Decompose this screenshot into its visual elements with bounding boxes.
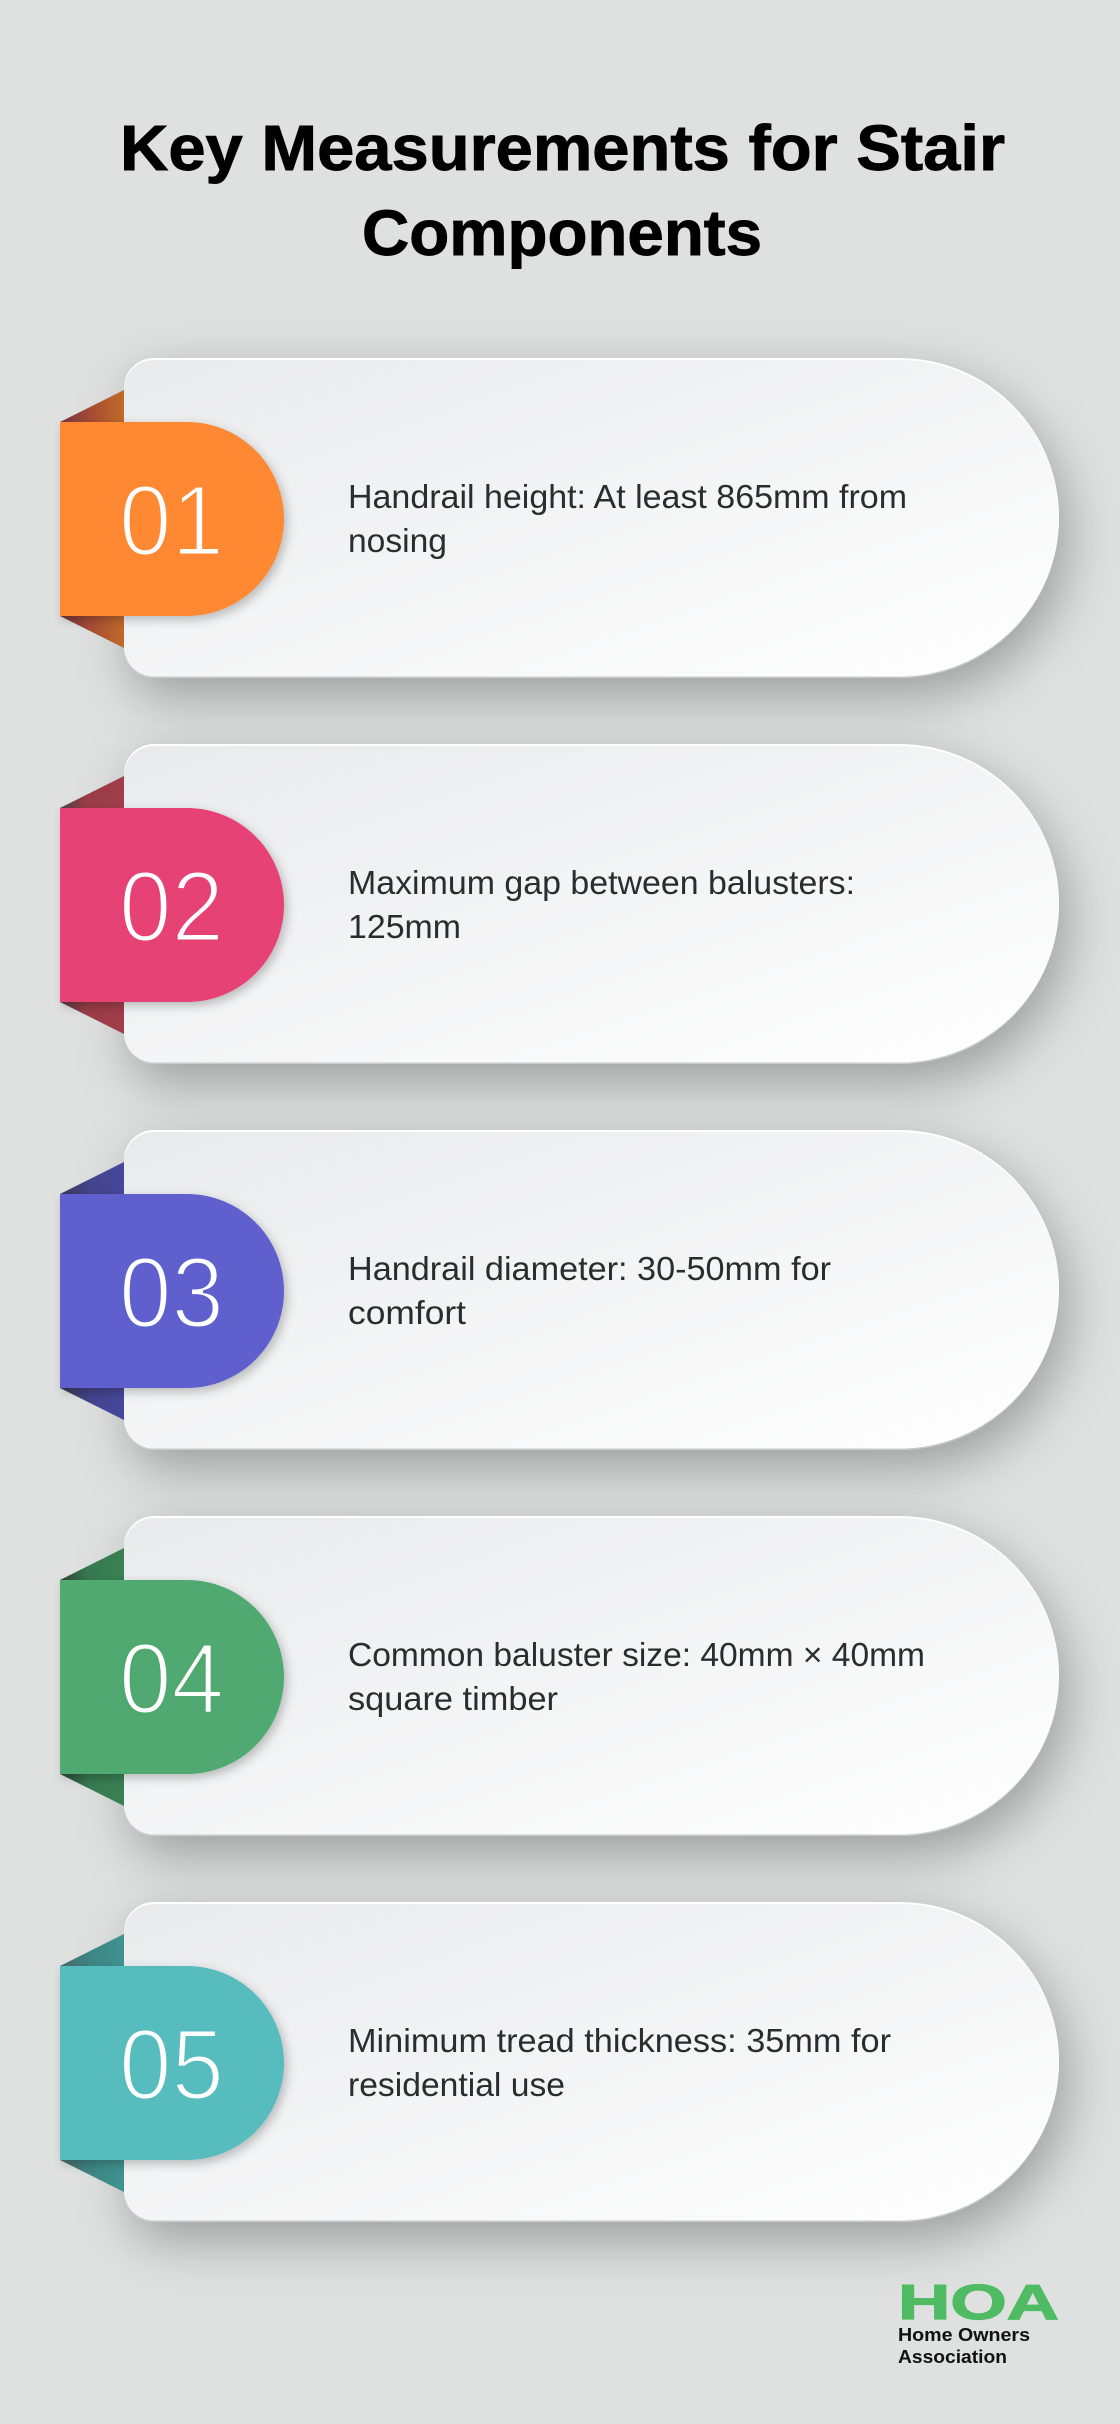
text 03 [348, 1250, 831, 1331]
ribbon folds 05 [60, 1934, 124, 2192]
logo: HOA Home Owners Association: HOA [898, 2276, 1059, 2330]
number 05: 05 [119, 2009, 224, 2121]
ribbon folds 02 [60, 776, 124, 1034]
panel: step 04 [60, 1516, 1059, 1836]
title [120, 112, 1005, 269]
number tab 04 [60, 1580, 284, 1774]
number 02: 02 [119, 851, 224, 963]
title: Components [362, 197, 762, 269]
text 05: residential use [348, 2066, 565, 2103]
text 05: Minimum tread thickness: 35mm for [348, 2022, 891, 2059]
number 03: 03 [119, 1237, 224, 1349]
text 02: 125mm [348, 908, 461, 945]
text 05 [348, 2022, 891, 2103]
ribbon folds 04 [60, 1548, 124, 1806]
number tab 01 [60, 422, 284, 616]
number tab 02 [60, 808, 284, 1002]
panel: step 05 [60, 1902, 1059, 2222]
ribbon folds 01 [60, 390, 124, 648]
number tab 03 [60, 1194, 284, 1388]
text 04: square timber [348, 1680, 558, 1717]
text 02: Maximum gap between balusters: [348, 864, 855, 901]
text 03: comfort [348, 1294, 466, 1331]
logo: HOA Home Owners Association: Home Owners [898, 2325, 1030, 2345]
panel: step 03 [60, 1130, 1059, 1450]
text 04 [348, 1636, 925, 1717]
text 03: Handrail diameter: 30-50mm for [348, 1250, 831, 1287]
text 02 [348, 864, 855, 945]
card background 01 [124, 358, 1059, 678]
card background 02 [124, 744, 1059, 1064]
number 04: 04 [119, 1623, 224, 1735]
number 01: 01 [119, 465, 224, 577]
card background 04 [124, 1516, 1059, 1836]
title: Key Measurements for Stair [120, 112, 1005, 184]
number tab 05 [60, 1966, 284, 2160]
panel: step 01 [60, 358, 1059, 678]
logo: HOA Home Owners Association [898, 2276, 1059, 2367]
text 01: nosing [348, 522, 447, 559]
text 04: Common baluster size: 40mm × 40mm [348, 1636, 925, 1673]
card background 03 [124, 1130, 1059, 1450]
text 01: Handrail height: At least 865mm from [348, 478, 907, 515]
logo: HOA Home Owners Association: Association [898, 2347, 1007, 2367]
panel: step 02 [60, 744, 1059, 1064]
ribbon folds 03 [60, 1162, 124, 1420]
text 01 [348, 478, 907, 559]
card background 05 [124, 1902, 1059, 2222]
